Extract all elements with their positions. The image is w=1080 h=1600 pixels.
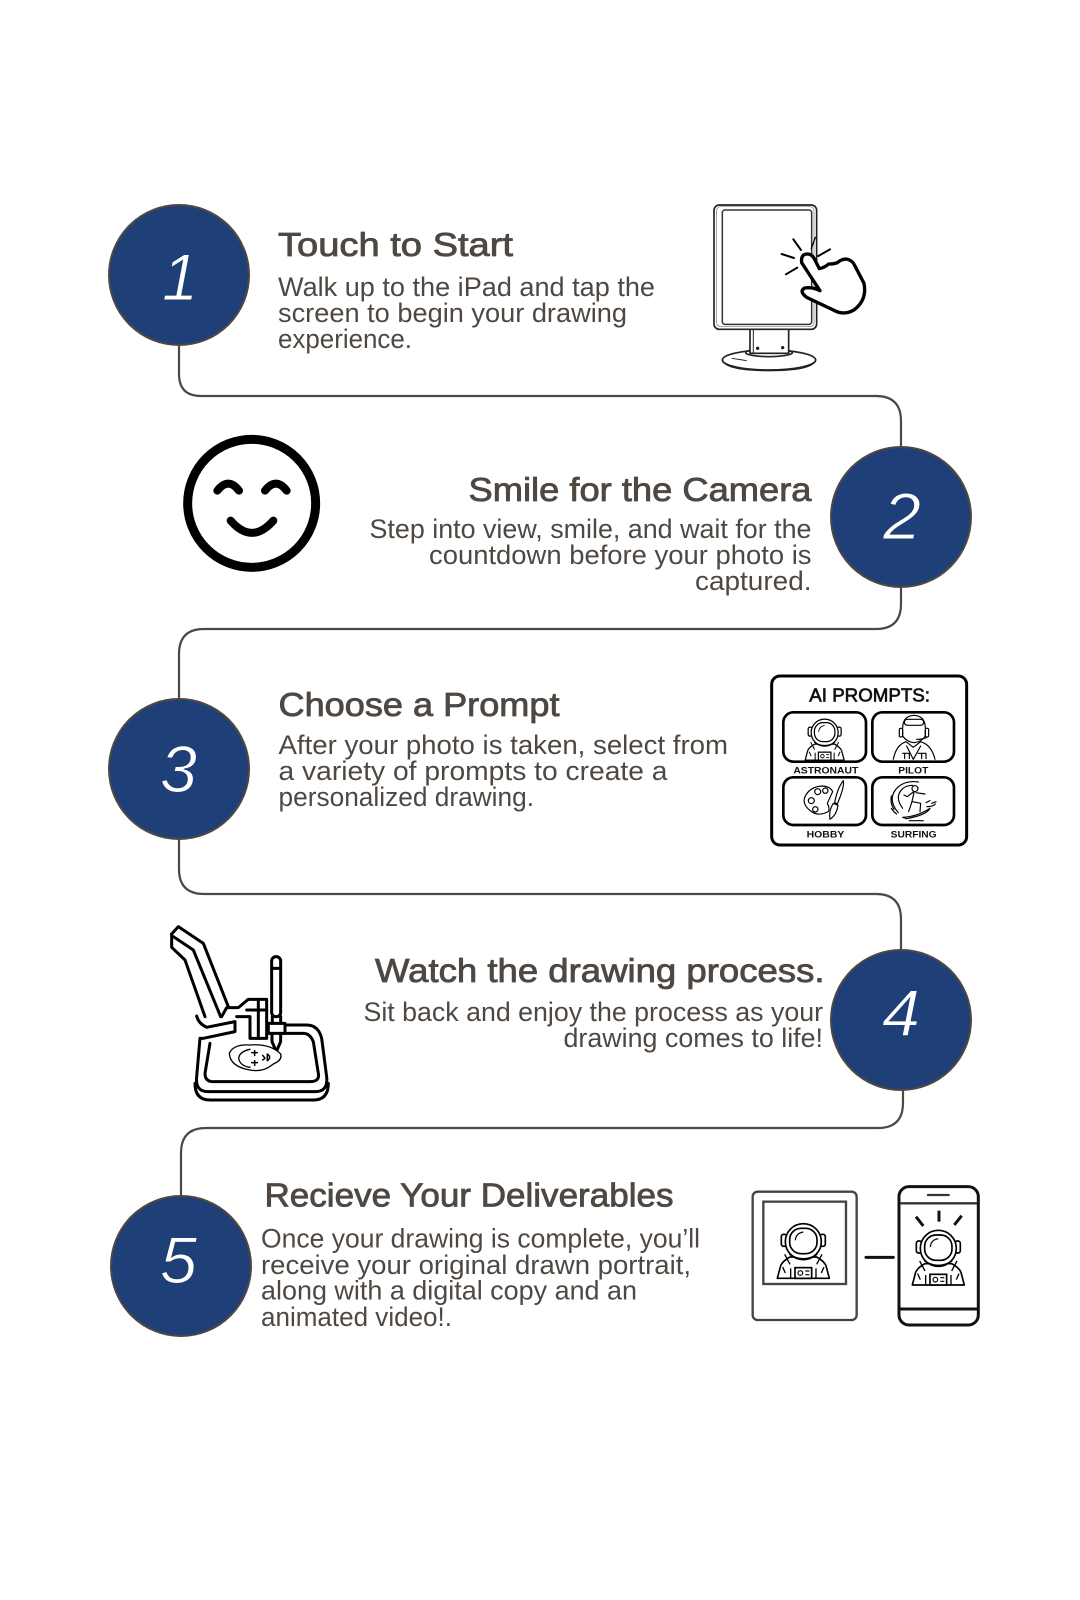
step 1 — [109, 205, 865, 371]
icon: printed portrait and phone — [753, 1187, 978, 1325]
step 1 number badge — [109, 205, 249, 345]
step 4 — [172, 927, 971, 1100]
step 5 body text: receive your original drawn portrait, — [261, 1250, 691, 1280]
icon: drawing robot arm — [172, 927, 328, 1100]
step 5 body text: Once your drawing is complete, you’ll — [261, 1224, 700, 1254]
phone — [899, 1187, 978, 1325]
step 3 body text: After your photo is taken, select from — [278, 730, 728, 760]
AI prompts title: AI PROMPTS: — [809, 685, 930, 706]
step 4 body text: drawing comes to life! — [564, 1023, 823, 1053]
step 4 number badge — [831, 950, 971, 1090]
card: surfing — [872, 777, 954, 840]
step 4 number badge: 4 — [882, 976, 920, 1050]
icon: smiling face — [188, 439, 316, 567]
step 2 number badge — [831, 447, 971, 587]
step 5 — [111, 1176, 978, 1336]
card: surfing: SURFING — [891, 830, 937, 840]
step 1 heading: Touch to Start — [278, 226, 513, 263]
step 3 number badge: 3 — [160, 732, 197, 806]
icon: AI prompts card — [772, 676, 967, 845]
card: hobby: HOBBY — [807, 830, 845, 840]
card: pilot — [872, 712, 954, 775]
step 5 number badge: 5 — [160, 1223, 197, 1297]
step 3 body text: personalized drawing. — [278, 782, 534, 812]
step 5 body text: along with a digital copy and an — [261, 1276, 637, 1306]
card: hobby — [783, 777, 866, 840]
step 2 body text: Step into view, smile, and wait for the — [370, 514, 812, 544]
step 3 body text — [278, 730, 728, 812]
card: pilot: PILOT — [898, 765, 929, 775]
printed portrait — [753, 1192, 857, 1320]
step 2 body text: countdown before your photo is — [429, 540, 812, 570]
step 1 body text: experience. — [278, 324, 412, 354]
step 4 body text: Sit back and enjoy the process as your — [364, 997, 823, 1027]
step 1 body text — [278, 272, 655, 354]
card: astronaut: ASTRONAUT — [793, 765, 859, 775]
step 3 body text: a variety of prompts to create a — [278, 756, 669, 786]
step 1 number badge: 1 — [162, 240, 198, 314]
step 4 heading: Watch the drawing process. — [375, 952, 824, 989]
step 5 heading: Recieve Your Deliverables — [264, 1176, 674, 1214]
step 2 heading: Smile for the Camera — [468, 471, 812, 508]
step 1 body text: screen to begin your drawing — [278, 298, 627, 328]
step 3 number badge — [109, 699, 249, 839]
card: astronaut — [783, 712, 866, 775]
step 1 body text: Walk up to the iPad and tap the — [278, 272, 655, 302]
step 3 — [109, 676, 967, 845]
connector lines — [179, 345, 903, 1196]
step 2 number badge: 2 — [882, 479, 921, 553]
step 2 body text — [370, 514, 812, 596]
step 5 number badge — [111, 1196, 251, 1336]
step 2 — [188, 439, 971, 596]
connecting dash — [866, 1253, 893, 1262]
icon: tablet with tapping hand — [714, 205, 865, 371]
step 5 body text — [261, 1224, 700, 1332]
step 3 heading: Choose a Prompt — [278, 686, 560, 723]
step 2 body text: captured. — [695, 566, 812, 596]
step 5 body text: animated video!. — [261, 1302, 452, 1332]
step 4 body text — [364, 997, 823, 1053]
